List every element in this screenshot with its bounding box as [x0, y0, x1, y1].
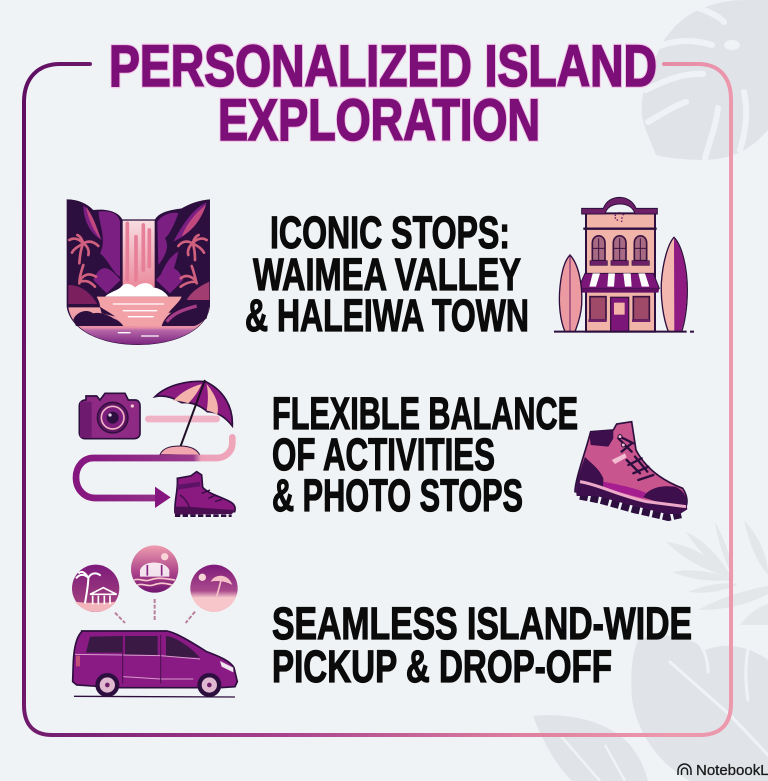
destination: palm and temple [72, 565, 119, 612]
text block: iconic stops [245, 207, 529, 341]
destination: beach [190, 565, 238, 612]
icon: hiking boot [575, 422, 687, 517]
icon: van with destination circles [72, 545, 238, 697]
text block: seamless pickup [272, 598, 692, 692]
icon: shop with surfboards [554, 197, 694, 333]
text block: flexible balance [272, 388, 578, 521]
palms [69, 235, 98, 287]
foam [105, 283, 168, 297]
awning [578, 273, 659, 288]
route [76, 437, 232, 498]
camera [79, 393, 140, 439]
windows [592, 236, 647, 261]
text block: iconic stops: WAIMEA VALLEY [253, 249, 521, 300]
frame [24, 64, 731, 735]
decorative leaf: palm fronds [666, 520, 768, 625]
lower front [590, 297, 606, 320]
falls [123, 221, 155, 287]
connector dashes [115, 599, 195, 623]
sole lugs [580, 496, 683, 517]
cliffs [83, 205, 120, 277]
lake [97, 297, 182, 327]
umbrella [155, 381, 232, 426]
rocks [73, 311, 123, 326]
text block: seamless pickup: PICKUP & DROP-OFF [272, 641, 612, 692]
text block: flexible balance: OF ACTIVITIES [272, 429, 495, 480]
decorative leaf: top right [642, 0, 768, 160]
decorative leaf: bottom right monstera [631, 635, 768, 781]
decorative leaf: bottom feather [533, 715, 648, 781]
surfboards [559, 255, 582, 332]
text block: flexible balance: & PHOTO STOPS [272, 470, 523, 521]
van [73, 631, 237, 697]
text block: flexible balance: FLEXIBLE BALANCE [272, 388, 578, 439]
text block: iconic stops: & HALEIWA TOWN [245, 290, 529, 341]
title: EXPLORATION [218, 88, 540, 153]
destination: sunset [131, 545, 178, 593]
icon: waterfall [67, 199, 210, 345]
boot [175, 472, 235, 513]
title: EXPLORATION [218, 88, 540, 153]
text block: iconic stops: ICONIC STOPS: [270, 207, 510, 258]
icon: camera, umbrella, route, boot [76, 380, 235, 516]
title [109, 34, 657, 153]
